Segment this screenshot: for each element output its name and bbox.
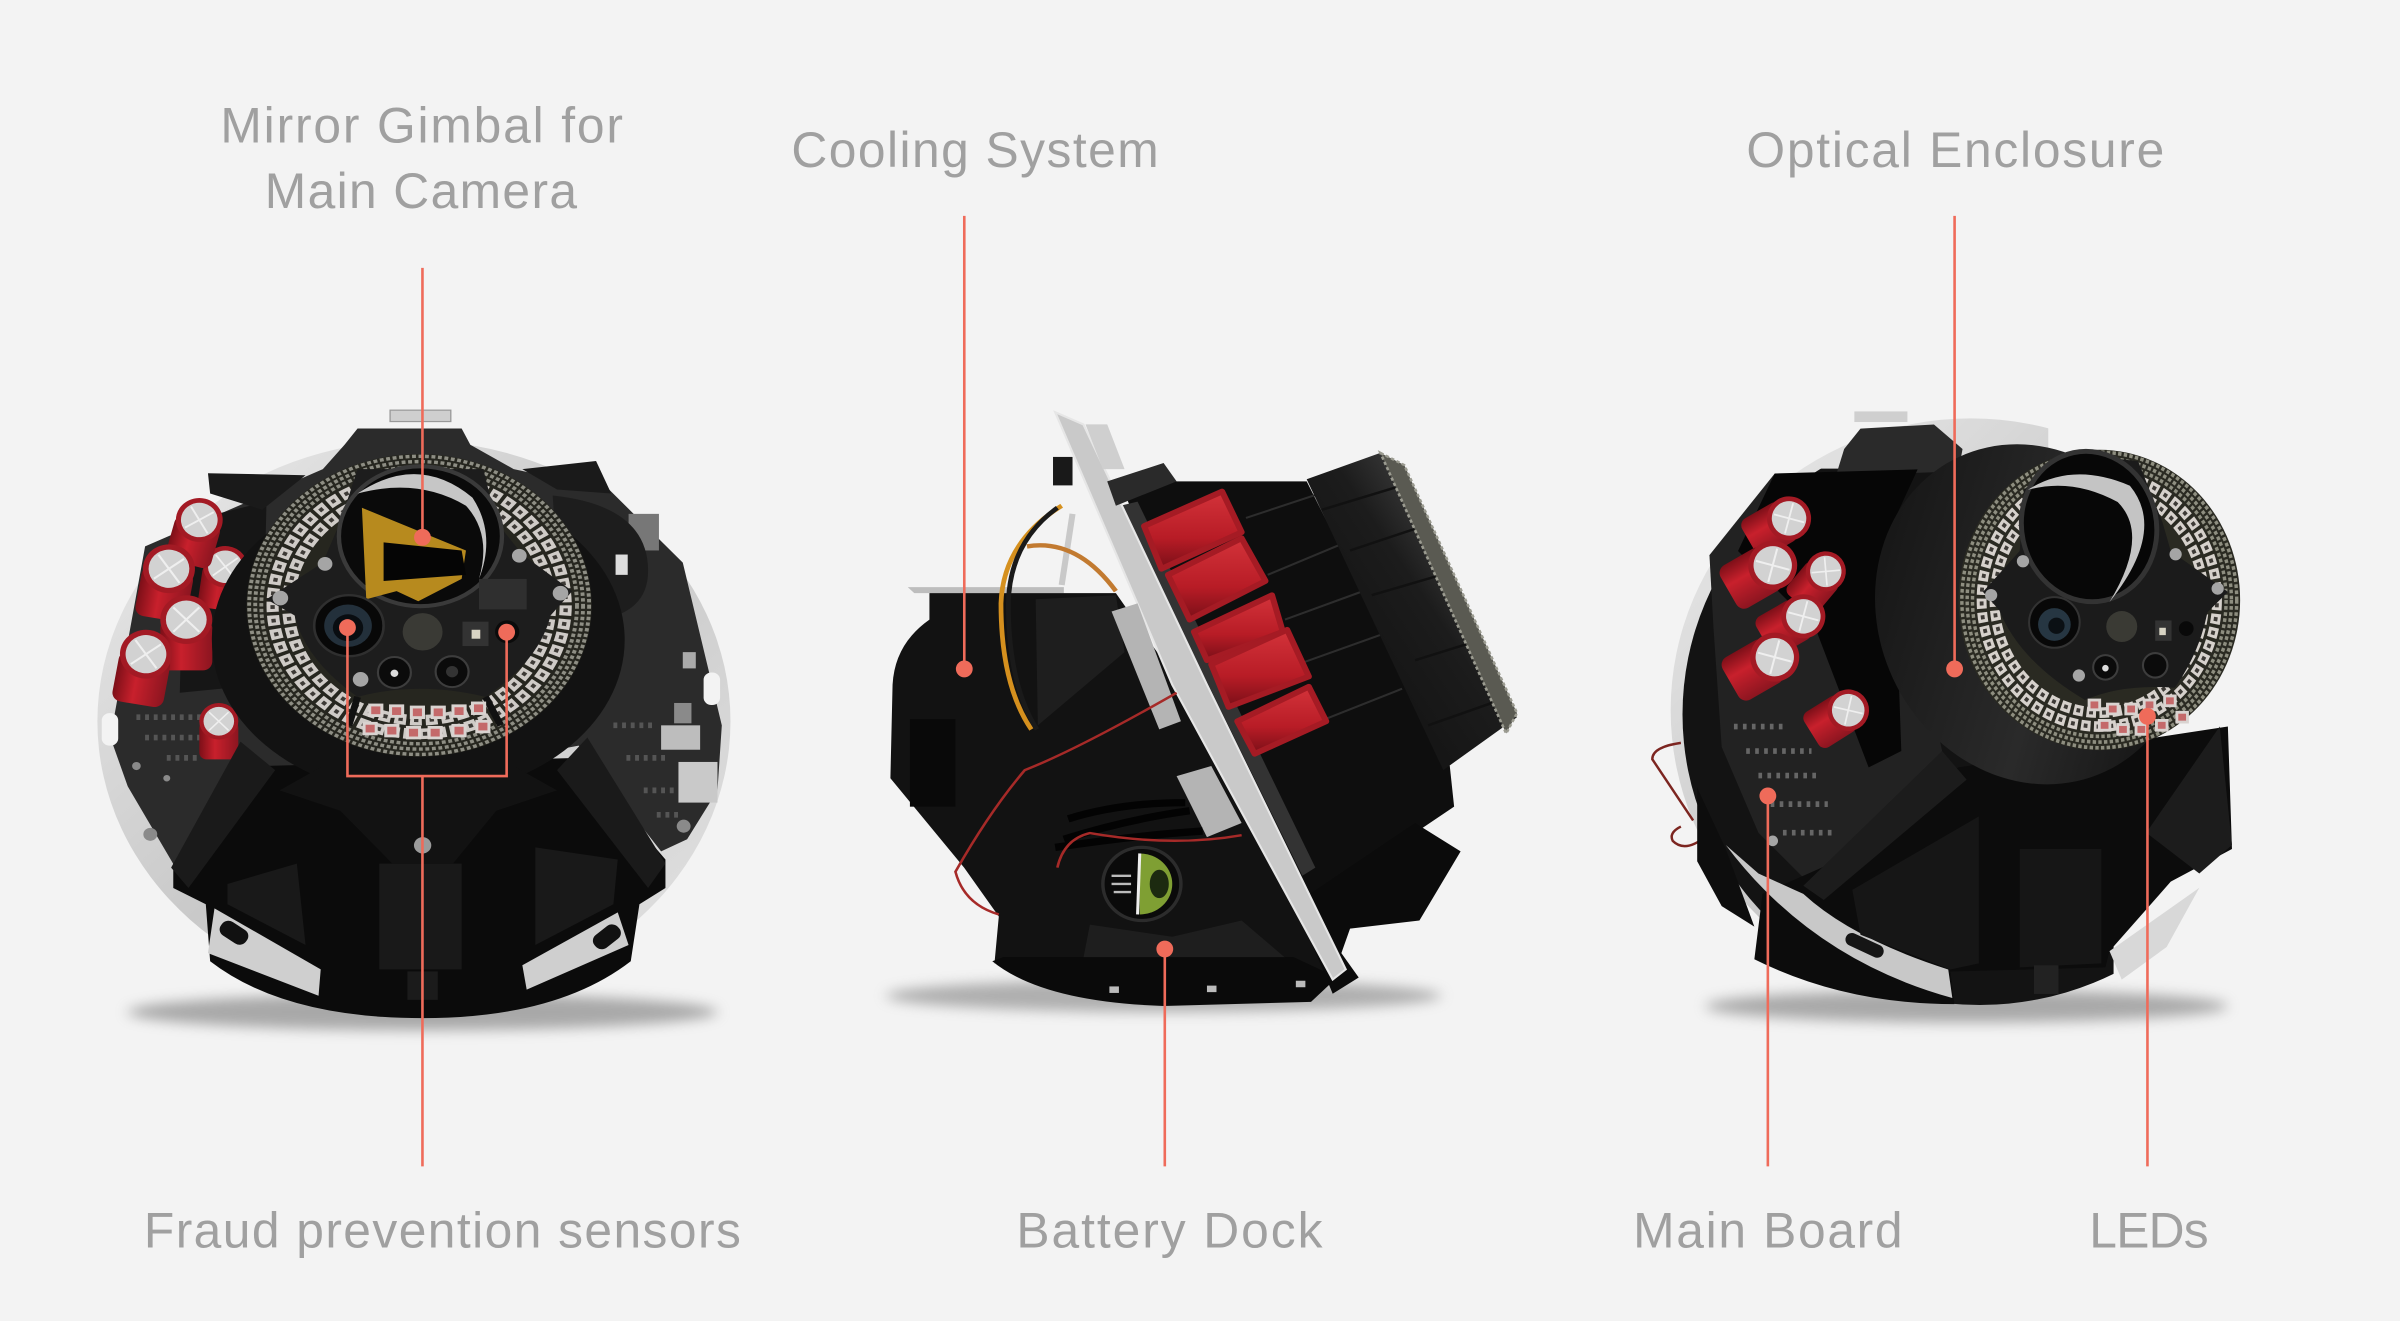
- callout dot: [414, 529, 431, 546]
- cooling system body: [890, 593, 1333, 986]
- lens rim highlight: [2028, 474, 2144, 602]
- body panels: [910, 595, 1289, 969]
- struts: [1803, 727, 2232, 900]
- struts: [171, 461, 665, 888]
- ground shadow: [1705, 990, 2228, 1023]
- callout: optical enclosure: [1946, 216, 1963, 677]
- lower yoke: [280, 766, 557, 864]
- lens rim: [358, 474, 486, 579]
- LED ring base: [247, 454, 592, 757]
- LED rings: [249, 456, 589, 754]
- cylinder mount: [1120, 481, 1454, 900]
- label: mirror gimbal for main camera: Mirror Gimbal for: [220, 97, 623, 153]
- main board: [110, 428, 722, 868]
- ground shadow: [886, 980, 1441, 1012]
- label: optical enclosure: Optical Enclosure: [1746, 122, 2164, 178]
- callout line: [421, 268, 423, 537]
- device: three-quarter view: [1652, 392, 2277, 1023]
- bracket lines: [347, 628, 507, 1166]
- side lobe: [553, 496, 648, 620]
- callout: battery dock: [1156, 941, 1173, 1166]
- callout: fraud prevention sensors: [339, 619, 515, 1166]
- face plate: [1983, 453, 2228, 700]
- silver plate: [1055, 412, 1346, 980]
- red indicator LEDs: [364, 703, 489, 738]
- label: main board: Main Board: [1633, 1202, 1903, 1258]
- plate screws: [273, 549, 568, 687]
- LED squares: [273, 477, 566, 734]
- red wires: [955, 693, 1242, 914]
- LED rings: [1962, 452, 2237, 748]
- disc interior: [1682, 468, 2114, 1005]
- top tab: [1854, 411, 1907, 422]
- screw: [414, 837, 431, 853]
- orange and yellow wires: [1001, 506, 1116, 729]
- sensor dots: [339, 619, 515, 641]
- top board pieces: [1053, 424, 1177, 506]
- cylinder ribs: [1322, 487, 1497, 725]
- left wires: [1652, 743, 1705, 846]
- silver bracket: [908, 587, 1064, 593]
- device: front view: [97, 410, 730, 1030]
- callout: cooling system: [956, 216, 973, 677]
- foot slot: [1843, 931, 1886, 960]
- black cables: [1055, 803, 1203, 847]
- board components: [132, 514, 717, 841]
- sensors: [378, 579, 527, 688]
- lens aperture: [2008, 439, 2171, 614]
- capacitors: [1716, 488, 1877, 751]
- foot slots: [217, 918, 624, 1000]
- silver feet: [208, 908, 629, 996]
- top tab: [390, 410, 451, 422]
- label: LEDs: LEDs: [2089, 1202, 2209, 1258]
- silver foot right: [2109, 888, 2199, 980]
- main board: [1709, 473, 1942, 878]
- silver disc: [1670, 418, 2048, 918]
- top board: [1836, 424, 1963, 476]
- callout: LEDs: [2139, 708, 2156, 1166]
- capacitors: [111, 493, 250, 759]
- wide camera lens: [2029, 597, 2080, 648]
- callout: main board: [1759, 788, 1776, 1166]
- dark cavity behind capacitors: [180, 502, 267, 693]
- gap between plate and rear LEDs: [349, 697, 501, 725]
- battery sticker: [1103, 847, 1181, 921]
- dock panels: [227, 847, 618, 969]
- label: battery dock: Battery Dock: [1016, 1202, 1323, 1258]
- face plate: [267, 469, 572, 697]
- capacitors: [1144, 491, 1326, 754]
- label: fraud prevention sensors: Fraud prevention sensors: [144, 1202, 741, 1258]
- left bracket: [1697, 788, 1754, 927]
- foot bolts: [1109, 981, 1305, 993]
- main camera lens: [314, 595, 384, 656]
- sticker: [616, 555, 628, 575]
- device: side view: [886, 412, 1517, 1012]
- outer housing ring: [212, 483, 625, 797]
- LED ring base: [1958, 450, 2240, 750]
- base panels: [1852, 816, 2101, 994]
- inner dark box: [1738, 469, 1918, 767]
- PCB strip: [1120, 502, 1315, 876]
- mount ribs: [1246, 494, 1402, 721]
- bottom feet: [992, 957, 1337, 1006]
- battery dock body: [173, 758, 665, 1018]
- silver rim band: [1726, 845, 1952, 998]
- bracket upright: [1062, 514, 1073, 585]
- LED squares: [1982, 473, 2217, 727]
- ground shadow: [128, 994, 717, 1030]
- board traces: [136, 717, 678, 815]
- board traces: [1734, 727, 1836, 833]
- sensors: [2093, 611, 2194, 680]
- label: mirror gimbal for main camera: Main Camera: [265, 163, 577, 219]
- lower body: [1754, 727, 2232, 1004]
- rear housing: [1820, 392, 2244, 836]
- lower chassis: [1272, 823, 1461, 994]
- callout: mirror gimbal: [414, 268, 431, 546]
- red LEDs: [2089, 696, 2187, 734]
- silver backing disc: [97, 441, 730, 1002]
- label: cooling system: Cooling System: [791, 122, 1159, 178]
- plate screws: [1767, 548, 2224, 846]
- mirror face: [384, 542, 466, 581]
- optical cylinder: [1307, 453, 1517, 770]
- label: mirror gimbal for main camera: [220, 97, 623, 219]
- gold mirror gimbal: [362, 508, 466, 601]
- LED ring edge: [1380, 453, 1517, 733]
- connectors: [1112, 603, 1242, 837]
- disc slots: [102, 672, 720, 746]
- mirror aperture: [339, 466, 502, 606]
